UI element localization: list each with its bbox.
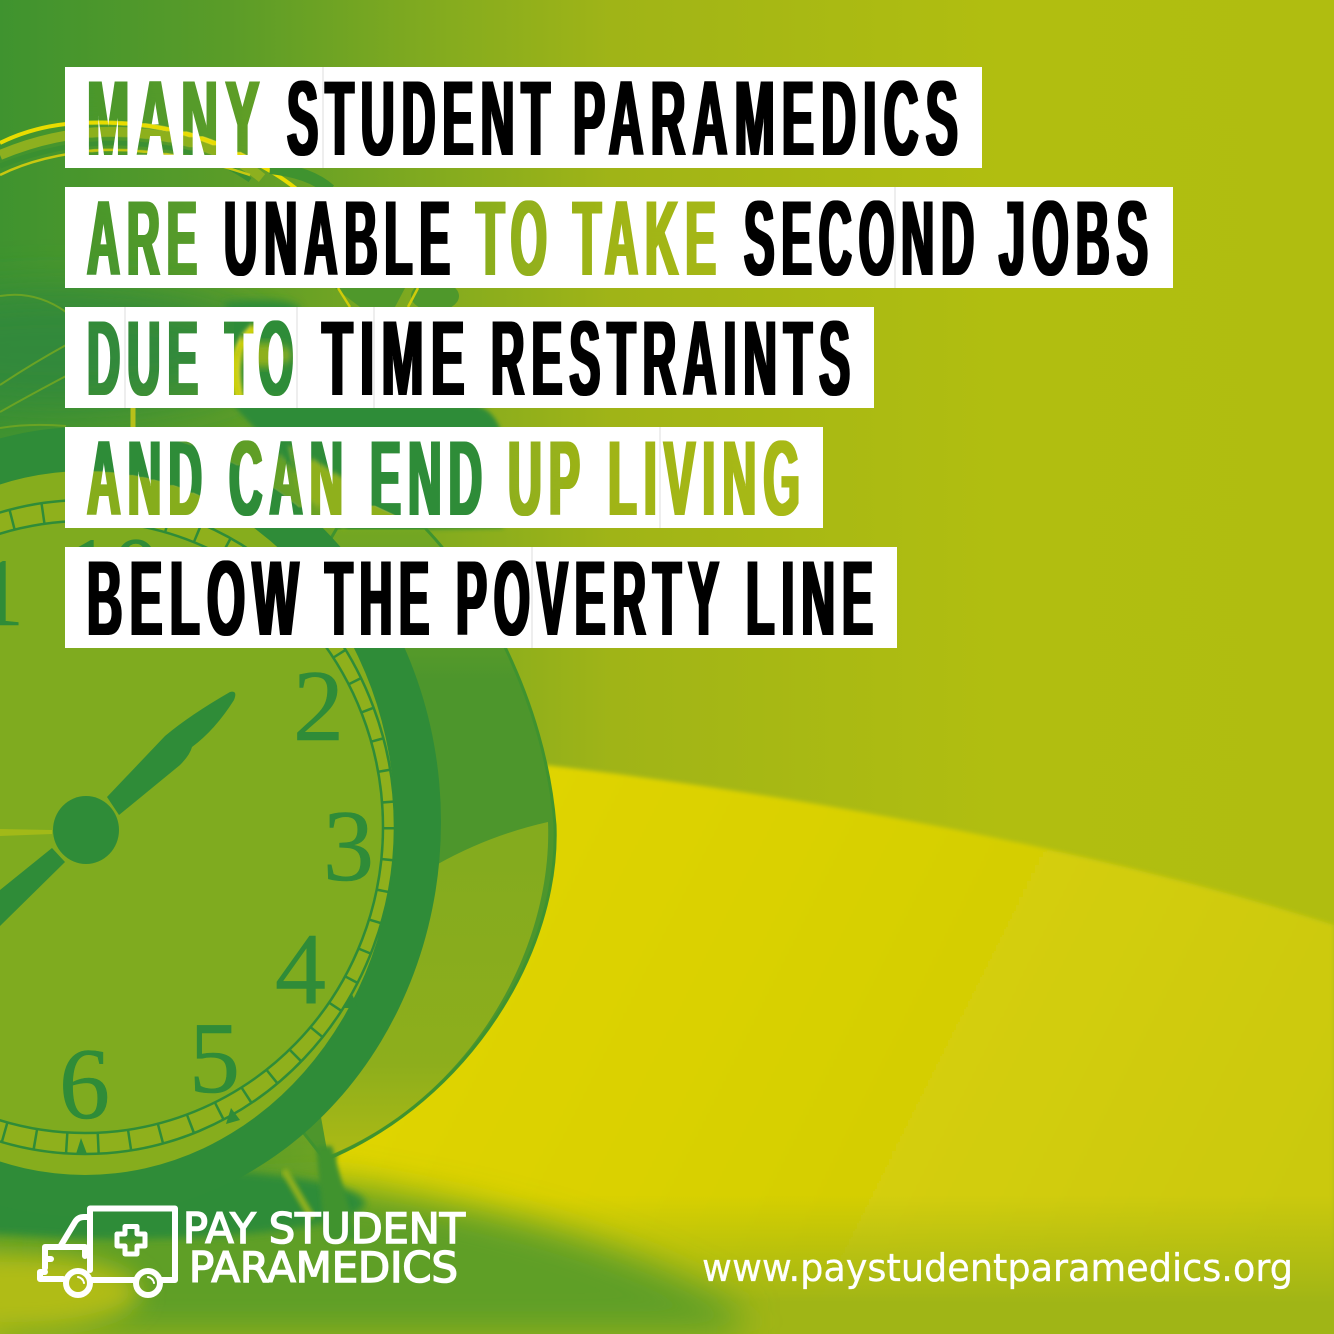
line 5: POVERTY <box>456 538 726 658</box>
line 5: THE <box>325 538 436 658</box>
clock numerals: 4 <box>275 913 326 1026</box>
headline: LINE <box>746 538 880 658</box>
clock numerals <box>0 518 374 1141</box>
line 1 <box>65 58 982 178</box>
logo wordmark <box>183 1204 465 1292</box>
line 2: TAKE <box>573 178 723 298</box>
headline <box>65 58 1173 658</box>
clock numerals: 2 <box>293 650 344 763</box>
line 3: DUE <box>87 298 205 418</box>
website url: www.paystudentparamedics.org <box>702 1246 1293 1290</box>
line 4 <box>65 418 823 538</box>
icon: clock hands and hub <box>0 692 235 926</box>
clock dial details <box>0 500 395 1240</box>
icon: ambulance <box>40 1208 175 1295</box>
line 2: ARE <box>87 178 204 298</box>
line 2 <box>65 178 1173 298</box>
line 1: MANY <box>87 58 267 178</box>
line 4: AND <box>87 418 209 538</box>
line 2: TO <box>476 178 554 298</box>
icon: minute tick ring <box>0 500 395 1154</box>
headline: RESTRAINTS <box>491 298 857 418</box>
clock face <box>0 521 383 1133</box>
clock numerals: 3 <box>323 790 374 903</box>
clock numerals: 6 <box>59 1028 110 1141</box>
line 3: TO <box>225 298 300 418</box>
headline: LIVING <box>608 418 807 538</box>
line 3: TIME <box>322 298 472 418</box>
line 3 <box>65 298 874 418</box>
logo wordmark: PAY STUDENT <box>183 1204 465 1253</box>
clock foot <box>284 1146 358 1240</box>
logo <box>40 1204 465 1295</box>
line 4: CAN <box>229 418 350 538</box>
line 4: UP <box>508 418 587 538</box>
clock numerals: 5 <box>189 1002 240 1115</box>
line 2: UNABLE <box>224 178 457 298</box>
line 5: BELOW <box>87 538 306 658</box>
line 2: SECOND <box>744 178 981 298</box>
logo wordmark: PARAMEDICS <box>189 1243 458 1292</box>
clock numerals: 10 <box>64 518 160 625</box>
line 1: STUDENT <box>287 58 557 178</box>
line 4: END <box>370 418 489 538</box>
line 5 <box>65 538 897 658</box>
